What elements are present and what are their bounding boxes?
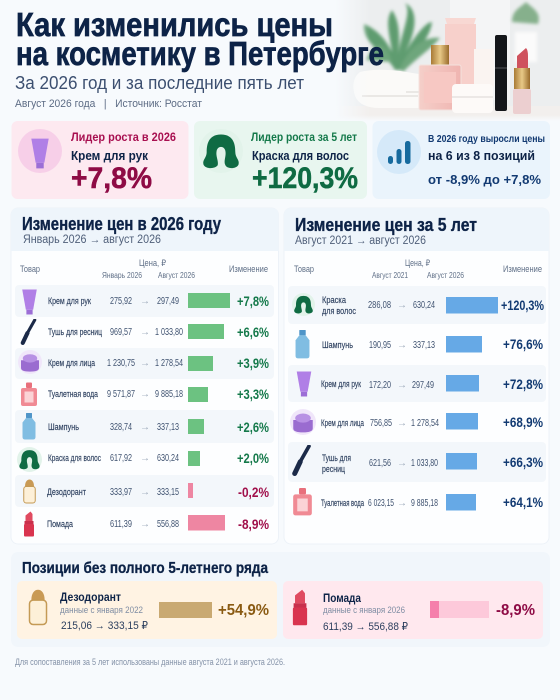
row: eau de toilette: Туалетная вода <box>321 498 364 508</box>
row: eau de toilette: → <box>140 389 150 400</box>
row: hand cream: +72,8% <box>503 377 543 392</box>
row: face cream: 756,85 <box>370 418 392 429</box>
card: deodorant: 215,06 → 333,15 ₽ <box>61 620 148 632</box>
row: deodorant <box>15 475 274 507</box>
card: leader 2026 <box>12 121 188 199</box>
row: hair dye: для волос <box>322 306 356 317</box>
row: face cream <box>15 348 274 379</box>
row: hand cream <box>15 285 274 317</box>
row: hair dye: Краска <box>322 295 347 306</box>
card: lipstick: 611,39 → 556,88 ₽ <box>323 621 408 633</box>
row: face cream: 1 230,75 <box>107 358 135 369</box>
row: hand cream: 297,49 <box>412 380 434 391</box>
row: face cream: 1 278,54 <box>411 418 439 429</box>
table header: Январь 2026 <box>102 271 142 280</box>
row: hair dye: 286,08 <box>368 300 391 311</box>
heading: Позиции без полного 5-летнего ряда <box>22 560 268 577</box>
row: lipstick <box>24 512 269 536</box>
row: eau de toilette: → <box>397 498 407 509</box>
row: shampoo: 190,95 <box>369 340 391 351</box>
row: eau de toilette: +64,1% <box>503 495 543 510</box>
row: hair dye: 630,24 <box>157 453 179 464</box>
row: shampoo: 337,13 <box>413 340 435 351</box>
row: mascara <box>288 442 546 482</box>
table header: Товар <box>294 264 314 274</box>
row: hand cream: 172,20 <box>369 380 391 391</box>
row: mascara: +6,6% <box>237 325 269 340</box>
card: deodorant: данные с января 2022 <box>60 605 143 616</box>
row: hand cream: → <box>140 296 150 307</box>
table header: Изменение <box>229 264 268 274</box>
row: mascara: → <box>397 458 407 469</box>
row: face cream: 1 278,54 <box>155 358 183 369</box>
card: leader 2026: Крем для рук <box>71 149 149 163</box>
row: hair dye: → <box>140 453 150 464</box>
card: leader 5 years: Краска для волос <box>252 149 349 163</box>
title <box>16 6 384 72</box>
row: shampoo: → <box>140 422 150 433</box>
card: deodorant: Дезодорант <box>60 592 121 604</box>
row: eau de toilette: Туалетная вода <box>48 389 99 400</box>
table header: Товар <box>20 264 40 274</box>
table header <box>294 258 542 280</box>
icon: deodorant <box>29 590 47 625</box>
row: deodorant: → <box>140 487 150 498</box>
icon: bars <box>377 130 421 174</box>
row: face cream: → <box>140 358 150 369</box>
period: Январь 2026 → август 2026 <box>23 234 161 246</box>
row: deodorant: 333,15 <box>157 487 179 498</box>
row: mascara: 1 033,80 <box>155 327 183 338</box>
row: face cream: Крем для лица <box>48 358 96 369</box>
heading: Изменение цен за 5 лет <box>295 215 477 235</box>
table header: Цена, ₽ <box>405 258 430 268</box>
card: lipstick: данные с января 2026 <box>323 605 405 616</box>
row: hair dye <box>288 286 546 324</box>
row: eau de toilette: 9 571,87 <box>107 389 135 400</box>
panel: changes over 5 years <box>284 208 549 544</box>
row: hand cream: 297,49 <box>157 296 179 307</box>
panel: positions without full 5-year series <box>11 552 550 647</box>
row: shampoo: +76,6% <box>503 337 543 352</box>
row: lipstick: → <box>140 519 150 530</box>
row: lipstick: 611,39 <box>110 519 132 530</box>
card: lipstick: -8,9% <box>496 602 535 619</box>
row: deodorant: Дезодорант <box>47 487 86 498</box>
card: 6 of 8 positions: на 6 из 8 позиций <box>428 148 535 163</box>
row: deodorant: -0,2% <box>238 485 269 500</box>
card: deodorant <box>17 581 277 639</box>
card: leader 5 years: Лидер роста за 5 лет <box>251 132 357 144</box>
row: shampoo: Шампунь <box>48 422 79 433</box>
row: mascara: Тушь для ресниц <box>48 327 102 338</box>
row: shampoo: Шампунь <box>322 340 353 351</box>
icon: hair dye <box>199 129 243 173</box>
footnote: Для сопоставления за 5 лет использованы данные августа 2021 и августа 2026. <box>15 657 285 667</box>
row: hand cream: 275,92 <box>110 296 132 307</box>
period: Август 2021 → август 2026 <box>295 235 426 247</box>
title: Как изменились цены <box>16 6 333 43</box>
row: hair dye: Краска для волос <box>48 453 101 464</box>
card: leader 5 years: +120,3% <box>252 162 358 195</box>
row: shampoo: → <box>397 340 407 351</box>
row: face cream: → <box>397 418 407 429</box>
row: face cream: +3,9% <box>237 356 269 371</box>
heading: Изменение цен в 2026 году <box>22 214 221 234</box>
row: face cream: +68,9% <box>503 415 543 430</box>
row: lipstick: Помада <box>47 519 74 530</box>
row: hair dye: +120,3% <box>501 298 544 313</box>
table header: Изменение <box>503 264 542 274</box>
card: 6 of 8 positions: от -8,9% до +7,8% <box>428 172 541 187</box>
row: hair dye <box>17 447 269 472</box>
row: mascara: 1 033,80 <box>411 458 438 469</box>
title: на косметику в Петербурге <box>16 35 384 72</box>
row: eau de toilette: +3,3% <box>237 387 269 402</box>
card: leader 5 years <box>194 121 367 199</box>
row: shampoo <box>296 330 543 358</box>
row: hair dye: → <box>397 300 407 311</box>
row: face cream: Крем для лица <box>321 418 364 429</box>
row: eau de toilette: 6 023,15 <box>368 498 394 509</box>
hero photo: cosmetics on a table <box>335 0 560 121</box>
table header: Цена, ₽ <box>139 258 166 268</box>
row: hair dye: 630,24 <box>413 300 435 311</box>
row: eau de toilette: 9 885,18 <box>411 498 438 509</box>
row: lipstick: 556,88 <box>157 519 179 530</box>
card: leader 2026: Лидер роста в 2026 <box>71 132 176 144</box>
icon: lipstick <box>293 590 307 625</box>
row: hair dye: +2,0% <box>237 451 269 466</box>
row: face cream <box>290 409 543 435</box>
row: shampoo: 337,13 <box>157 422 179 433</box>
row: shampoo: 328,74 <box>110 422 132 433</box>
row: hand cream: → <box>397 380 407 391</box>
row: deodorant: 333,97 <box>110 487 132 498</box>
card: 6 of 8 positions <box>372 121 550 199</box>
row: mascara: → <box>140 327 150 338</box>
panel: changes in 2026 <box>11 208 278 544</box>
row: eau de toilette <box>293 488 543 515</box>
row: mascara: 621,56 <box>369 458 391 469</box>
icon: hand cream tube <box>18 129 62 173</box>
row: eau de toilette: 9 885,18 <box>155 389 183 400</box>
date and source: Август 2026 года | Источник: Росстат <box>15 98 202 110</box>
row: lipstick: -8,9% <box>238 517 269 532</box>
row: mascara: +66,3% <box>503 455 543 470</box>
card: leader 2026: +7,8% <box>71 162 152 195</box>
row: mascara <box>23 320 269 343</box>
row: mascara: ресниц <box>322 464 345 475</box>
row: hand cream: +7,8% <box>237 294 269 309</box>
card: lipstick <box>283 581 543 639</box>
card: lipstick: Помада <box>323 593 362 605</box>
table header <box>20 258 268 280</box>
row: mascara: Тушь для <box>322 453 351 464</box>
row: hand cream: Крем для рук <box>321 379 362 390</box>
table header: Август 2026 <box>427 271 464 280</box>
card: deodorant: +54,9% <box>218 602 269 619</box>
table header: Август 2021 <box>372 271 408 280</box>
row: hand cream <box>288 365 546 402</box>
table header: Август 2026 <box>158 271 195 280</box>
row: hand cream: Крем для рук <box>48 296 92 307</box>
row: shampoo: +2,6% <box>237 420 269 435</box>
row: shampoo <box>15 410 274 443</box>
row: mascara: 969,57 <box>110 327 132 338</box>
subtitle: За 2026 год и за последние пять лет <box>15 73 304 93</box>
row: hair dye: 617,92 <box>110 453 132 464</box>
row: eau de toilette <box>21 382 269 406</box>
